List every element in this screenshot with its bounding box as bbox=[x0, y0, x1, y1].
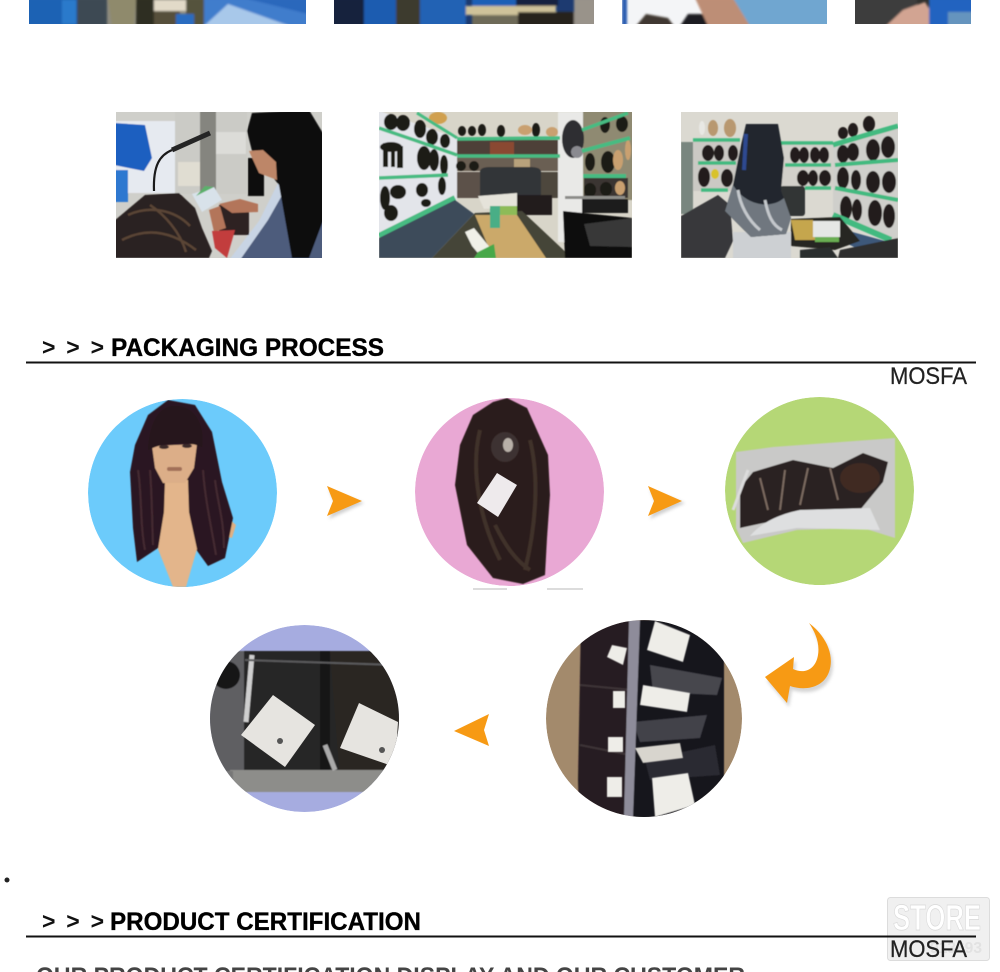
heading: product certification: PRODUCT CERTIFICATION bbox=[110, 908, 421, 936]
wig being styled bbox=[219, 205, 249, 235]
small bullet dot bbox=[4, 878, 10, 882]
step 4: packed wigs in carton bbox=[546, 620, 742, 820]
step 5: bagged wigs ready to ship bbox=[208, 625, 401, 812]
photo: wig showroom with sofa bbox=[377, 110, 634, 258]
neck and bust bbox=[158, 480, 197, 587]
armchair bbox=[480, 167, 541, 198]
back shelf rows bbox=[457, 140, 560, 156]
tool tray bbox=[196, 186, 214, 196]
white tag bbox=[477, 473, 517, 517]
plastic bag backing bbox=[208, 651, 401, 792]
step 3: wig in plastic bag bbox=[725, 397, 914, 585]
back shelf backings bbox=[693, 141, 740, 191]
green shelf boards bbox=[379, 113, 630, 236]
grey bag highlights bbox=[650, 665, 722, 695]
heading: packaging process: PACKAGING PROCESS bbox=[111, 334, 384, 362]
white top of model bbox=[733, 232, 791, 259]
reflection under step 2 bbox=[473, 588, 583, 590]
package column left bbox=[578, 620, 634, 817]
step 1: wig on mannequin bbox=[88, 399, 277, 587]
hair mass bbox=[130, 400, 233, 566]
floor carpet bbox=[379, 200, 474, 258]
curved arrow: step 3 to step 4 bbox=[765, 623, 833, 707]
arrow: step 2 to step 3 bbox=[648, 486, 685, 519]
tissue box bbox=[813, 221, 840, 237]
brand label: MOSFA: MOSFA bbox=[890, 363, 967, 390]
bottle bbox=[490, 206, 500, 228]
heading: product certification: > > > bbox=[42, 908, 104, 934]
wall pillar bbox=[558, 112, 583, 242]
tablet bbox=[192, 187, 222, 212]
bangs bbox=[148, 406, 203, 450]
arrow: step 1 to step 2 bbox=[327, 486, 364, 519]
brand label: MOSFA lower: MOSFA bbox=[890, 936, 967, 963]
photo strip: worker with blue shirt bbox=[622, 0, 830, 26]
photo strip: factory worker bins bbox=[27, 0, 308, 26]
top mannequins bbox=[708, 119, 736, 137]
black sofa left bbox=[681, 195, 733, 258]
right shelf backings bbox=[833, 127, 898, 240]
black sofa bbox=[563, 211, 632, 258]
long wig on model bbox=[725, 124, 791, 237]
paper labels bbox=[607, 621, 695, 817]
photo: worker styling a wig bbox=[114, 110, 324, 260]
arrow: step 4 to step 5 bbox=[454, 714, 489, 746]
face bbox=[152, 444, 197, 483]
store watermark bbox=[888, 897, 990, 960]
red sleeve bbox=[212, 230, 235, 258]
left wall display panels bbox=[377, 110, 457, 236]
steel shelf uniform bbox=[175, 110, 247, 194]
product cards bbox=[241, 695, 315, 767]
folded wig bbox=[455, 398, 550, 584]
photo strip: factory workbench bbox=[332, 0, 596, 26]
sofa lower right bbox=[800, 247, 838, 258]
worker uniform bbox=[240, 196, 322, 258]
package column right bbox=[632, 620, 724, 820]
worker dark inner space bbox=[248, 158, 264, 196]
desk lamp bbox=[154, 133, 210, 191]
tissue packet on table edge bbox=[464, 227, 490, 254]
plastic sheen bbox=[750, 508, 880, 536]
plastic bag bbox=[736, 438, 895, 543]
central bag seam bbox=[624, 620, 640, 817]
mannequin wigs on displays bbox=[380, 114, 628, 221]
lips bbox=[167, 467, 182, 471]
photo strip: comb and hands bbox=[855, 0, 971, 24]
eyes bbox=[159, 445, 169, 449]
worker face bbox=[249, 150, 277, 180]
left panel bbox=[681, 142, 693, 214]
photo: showroom with long wig model bbox=[681, 112, 898, 259]
worker arm bbox=[219, 199, 258, 213]
wig inside bag bbox=[740, 453, 888, 528]
heading: packaging process: > > > bbox=[42, 334, 104, 360]
store watermark: 913693 bbox=[930, 940, 982, 957]
table bbox=[791, 217, 860, 250]
right shelf backing bbox=[583, 110, 634, 200]
blue signage panel bbox=[114, 123, 152, 171]
back armchair bbox=[780, 186, 805, 216]
display wigs bbox=[698, 116, 896, 228]
glass table bbox=[432, 211, 572, 258]
green shelf boards bbox=[693, 126, 898, 240]
worker hair bbox=[247, 110, 324, 258]
side bench bbox=[565, 196, 625, 199]
blue bin bbox=[114, 170, 128, 202]
hanging long wig bbox=[562, 120, 584, 158]
curly wig on block bbox=[114, 193, 212, 258]
white carton behind panel bbox=[114, 121, 176, 193]
carpet bbox=[838, 228, 885, 250]
step 2: wig with tag bbox=[415, 398, 604, 586]
wig cap bbox=[491, 432, 519, 462]
mannequin shoulder bbox=[224, 518, 236, 538]
white box on table bbox=[478, 193, 517, 209]
